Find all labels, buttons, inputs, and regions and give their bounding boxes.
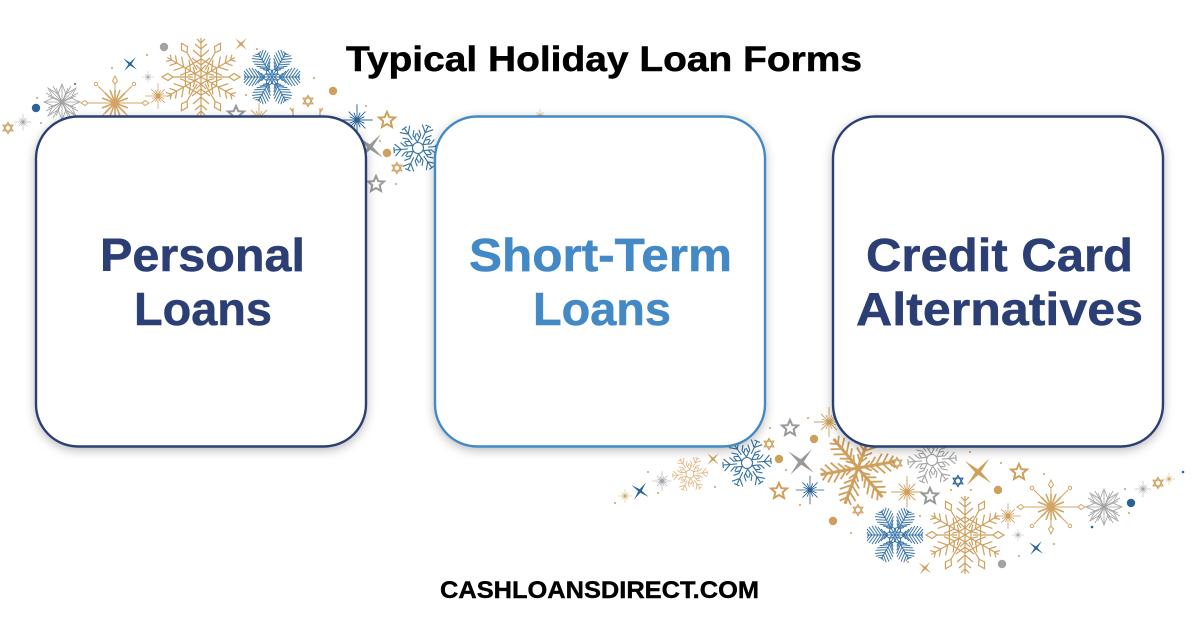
icon: gold starburst snowflake: [1017, 480, 1085, 534]
small stars and sparkles, top: [3, 32, 547, 191]
decoration: top-left snowflake garland: [3, 32, 547, 191]
icon: large gold snowflake: [162, 38, 240, 116]
card label: Short-Term: [469, 229, 732, 281]
icon: gray snowflake: [1086, 489, 1122, 525]
icon: gray open snowflake: [907, 435, 957, 485]
card background: [833, 116, 1163, 446]
card label: Alternatives: [856, 283, 1143, 335]
icon: blue open snowflake: [722, 438, 772, 488]
icon: gray snowflake: [44, 84, 80, 120]
icon: dense blue snowflake: [244, 48, 300, 106]
icon: dense blue snowflake: [867, 506, 923, 564]
title: Typical Holiday Loan Forms: [346, 40, 862, 79]
card label: Personal: [100, 229, 305, 281]
icon: blue open snowflake: [393, 123, 443, 173]
card label: Loans: [533, 283, 671, 335]
panel: Credit Card Alternatives: [833, 116, 1163, 446]
card background: [36, 116, 366, 446]
panel: Personal Loans: [36, 116, 366, 446]
card label: Loans: [134, 283, 272, 335]
small stars and sparkles, bottom: [614, 407, 1184, 580]
card label: Credit Card: [866, 229, 1133, 281]
card background: [435, 116, 765, 446]
icon: solid gold snowflake: [819, 429, 897, 507]
decoration: bottom-right snowflake garland: [614, 407, 1184, 580]
icon: large gold snowflake: [926, 496, 1004, 574]
footer website: CASHLOANSDIRECT.COM: [440, 577, 759, 604]
panel: Short-Term Loans: [435, 116, 765, 446]
icon: gold starburst snowflake: [81, 76, 149, 130]
icon: gold dense snowflake: [672, 456, 708, 492]
